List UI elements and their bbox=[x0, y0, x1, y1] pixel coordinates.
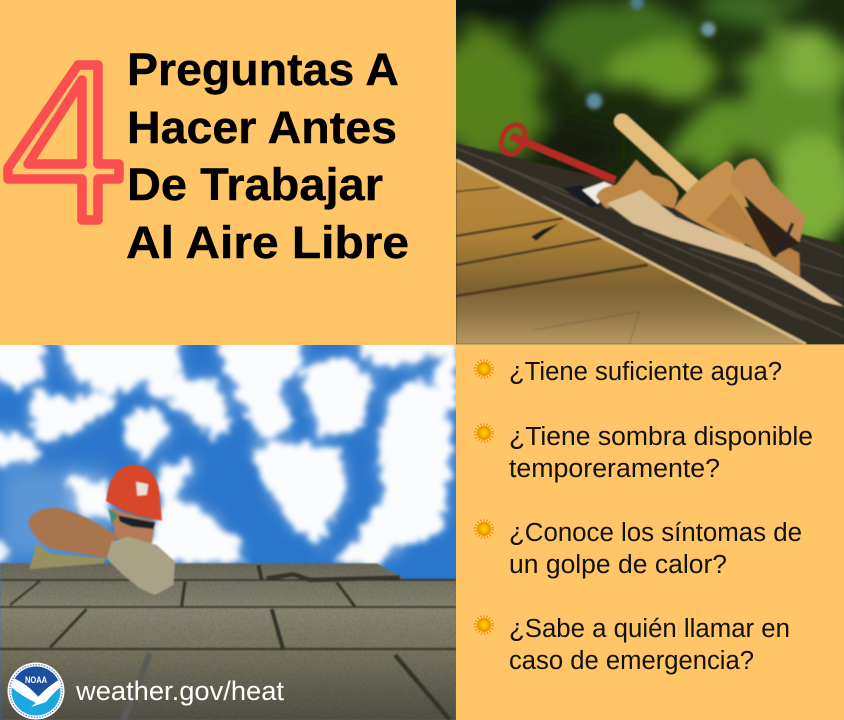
face and sunglasses bbox=[112, 508, 155, 543]
NOAA logo bbox=[8, 662, 64, 720]
wall bbox=[0, 563, 456, 720]
question list bbox=[473, 358, 813, 675]
big number 4 outline bbox=[8, 65, 119, 220]
belt bbox=[607, 190, 844, 307]
clouds bbox=[0, 332, 456, 565]
shingles bbox=[456, 143, 844, 344]
question 2 bbox=[473, 422, 813, 483]
title bbox=[126, 44, 409, 268]
hard hat bbox=[106, 465, 162, 521]
question 4: ¿Sabe a quién llamar en bbox=[509, 615, 790, 643]
glove bbox=[107, 537, 175, 595]
NOAA logo: NOAA bbox=[25, 675, 47, 686]
title: Al Aire Libre bbox=[126, 217, 409, 268]
question 3: ¿Conoce los síntomas de bbox=[509, 519, 802, 547]
question 3: un golpe de calor? bbox=[509, 551, 727, 579]
arm bbox=[28, 508, 117, 558]
question 4: caso de emergencia? bbox=[509, 647, 754, 675]
title: Hacer Antes bbox=[127, 102, 397, 153]
question 2: ¿Tiene sombra disponible bbox=[509, 423, 813, 451]
question 2: temporeramente? bbox=[509, 455, 720, 483]
question 3 bbox=[473, 518, 802, 579]
hammer handle bbox=[622, 122, 691, 185]
website url: weather.gov/heat bbox=[75, 676, 284, 706]
wood deck bbox=[456, 160, 806, 344]
title: De Trabajar bbox=[127, 159, 383, 210]
red tool bbox=[497, 121, 615, 180]
leather pouches bbox=[596, 159, 679, 208]
question 1: ¿Tiene suficiente agua? bbox=[509, 358, 782, 386]
photo: worker on a block wall under a blue sky bbox=[0, 332, 456, 720]
title: Preguntas A bbox=[127, 44, 399, 95]
question 4 bbox=[473, 614, 790, 675]
photo: tool belt on a roof bbox=[429, 0, 844, 344]
